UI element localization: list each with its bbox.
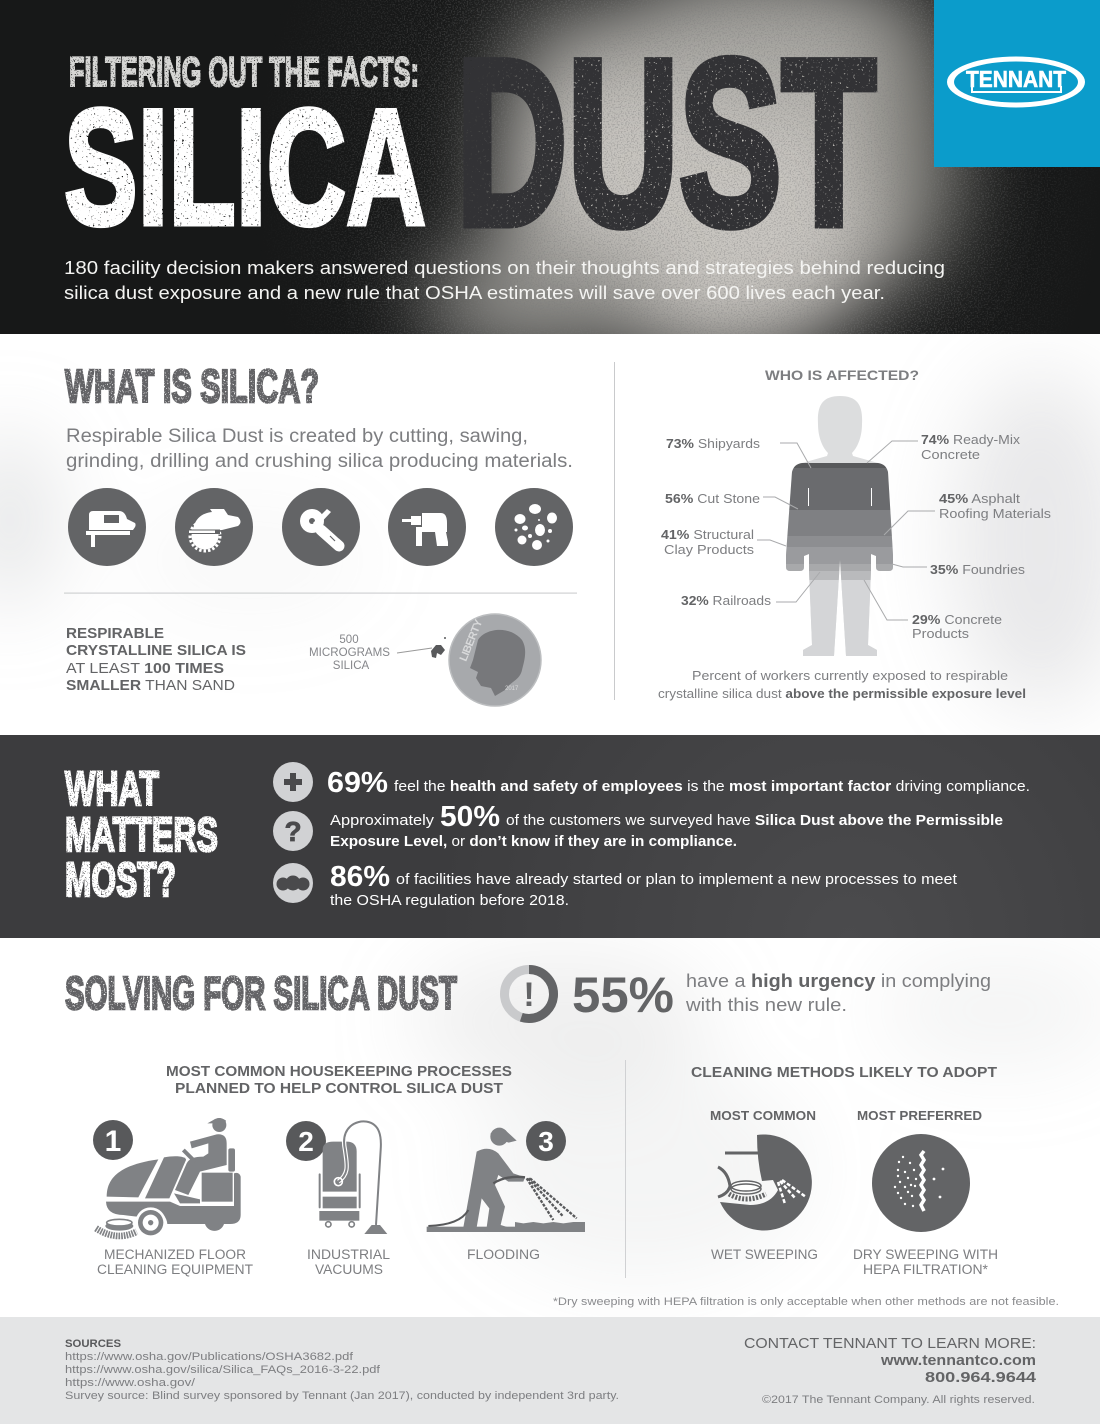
title kicker: FILTERING OUT THE FACTS:	[69, 48, 419, 95]
subheadings: most common and most preferred	[710, 1109, 982, 1123]
label: 500 micrograms silica: SILICA	[333, 660, 370, 672]
labels: housekeeping processes: VACUUMS	[315, 1262, 383, 1277]
icon: worker flooding floor with hose	[427, 1128, 585, 1232]
text: 100 times smaller: AT LEAST 100 TIMES	[66, 660, 224, 677]
labels: industries: Products	[912, 626, 970, 641]
labels: housekeeping processes: INDUSTRIAL	[307, 1247, 391, 1262]
icon: crushed particles	[495, 488, 573, 566]
icon: jigsaw cutting	[68, 488, 146, 566]
labels: cleaning methods: WET SWEEPING	[711, 1247, 818, 1262]
stat: 50 percent: of the customers we surveyed have Silica Dust above the Permissible	[506, 812, 1003, 829]
icon: dime with dust pile: LIBERTY	[458, 617, 486, 663]
subheadings: most common and most preferred: MOST COMMON	[710, 1109, 816, 1123]
heading: what matters most: MATTERS	[65, 809, 218, 862]
stat: 69 percent: feel the health and safety of employees is the most important factor driving compliance.	[394, 778, 1030, 795]
logo: Tennant	[934, 0, 1100, 167]
stat: 86 percent	[330, 861, 958, 909]
icon: number 1: 1	[105, 1125, 121, 1158]
heading: housekeeping processes	[166, 1064, 512, 1097]
text: contact: CONTACT TENNANT TO LEARN MORE:	[744, 1335, 1036, 1352]
title word: silica: SILICA	[64, 75, 426, 259]
logo: Tennant: TENNANT	[966, 66, 1066, 92]
panel: solving for silica dust	[65, 967, 1059, 1308]
text: sources: https://www.osha.gov/Publications/OSHA3682.pdf	[65, 1351, 354, 1363]
labels: industries: 32% Railroads	[681, 593, 772, 608]
labels: housekeeping processes	[97, 1247, 540, 1277]
text: silica definition: grinding, drilling and crushing silica producing materials.	[66, 451, 573, 472]
title word: dust: DUST	[456, 11, 876, 275]
labels: industries: 74% Ready-Mix	[921, 432, 1021, 447]
leader lines	[757, 441, 935, 620]
text: sources: https://www.osha.gov/	[65, 1377, 196, 1389]
panel: what matters most	[0, 735, 1100, 938]
label: 500 micrograms silica	[309, 634, 390, 672]
labels: industries: 45% Asphalt	[939, 491, 1020, 506]
stat: 50 percent: Exposure Level, or don’t know if they are in compliance.	[330, 833, 737, 850]
heading: housekeeping processes: PLANNED TO HELP CONTROL SILICA DUST	[175, 1081, 503, 1097]
stat: 50 percent: 50%	[440, 801, 500, 833]
text: 100 times smaller: SMALLER THAN SAND	[66, 677, 235, 694]
heading: housekeeping processes: MOST COMMON HOUSEKEEPING PROCESSES	[166, 1064, 512, 1080]
icon: wet sweeping	[718, 1135, 812, 1231]
heading: cleaning methods: CLEANING METHODS LIKELY TO ADOPT	[691, 1065, 997, 1081]
subheadings: most common and most preferred: MOST PREFERRED	[857, 1109, 982, 1123]
text: high urgency: with this new rule.	[685, 995, 847, 1015]
stat: 86 percent: the OSHA regulation before 2018.	[330, 892, 569, 909]
panel: footer	[0, 1317, 1100, 1424]
labels: industries: Concrete	[921, 447, 980, 462]
text: sources: https://www.osha.gov/silica/Silica_FAQs_2016-3-22.pdf	[65, 1364, 381, 1376]
icon: industrial vacuum	[319, 1121, 387, 1234]
labels: housekeeping processes: CLEANING EQUIPMENT	[97, 1262, 253, 1277]
icon: number 3: 3	[538, 1126, 554, 1157]
labels: cleaning methods	[711, 1247, 998, 1277]
icon: dry sweeping with HEPA	[872, 1134, 970, 1232]
text: sources: Survey source: Blind survey sponsored by Tennant (Jan 2017), conducted by independent 3rd party.	[65, 1390, 619, 1402]
icon: group of people	[273, 863, 313, 903]
text: sources: SOURCES	[65, 1338, 121, 1350]
text: silica definition	[66, 426, 573, 472]
labels: industries	[661, 432, 1052, 641]
chart: 55 percent donut	[504, 970, 554, 1018]
panel: what is silica	[64, 360, 577, 706]
label: 500 micrograms silica: 500	[339, 634, 359, 646]
intro text	[64, 258, 945, 303]
icon: question mark: ?	[284, 816, 302, 847]
icon: drill	[388, 488, 466, 566]
heading: what is silica: WHAT IS SILICA?	[65, 360, 319, 412]
footnote: *Dry sweeping with HEPA filtration is only acceptable when other methods are not feasible.	[553, 1296, 1059, 1308]
text: contact: www.tennantco.com	[880, 1353, 1036, 1369]
text: sources	[65, 1338, 619, 1402]
label: 500 micrograms silica: MICROGRAMS	[309, 647, 390, 659]
labels: cleaning methods: DRY SWEEPING WITH	[853, 1247, 998, 1262]
text: contact	[744, 1335, 1036, 1406]
text: high urgency	[685, 971, 991, 1015]
stat: 50 percent: Approximately	[330, 812, 435, 829]
panel: header banner	[0, 0, 1100, 360]
labels: housekeeping processes: MECHANIZED FLOOR	[104, 1247, 246, 1262]
icon: number 1	[93, 1120, 133, 1160]
labels: housekeeping processes: FLOODING	[467, 1247, 540, 1262]
icon: dime with dust pile: 2017	[505, 686, 519, 692]
caption: percent of workers: crystalline silica dust above the permissible exposure level	[658, 686, 1026, 701]
labels: cleaning methods: HEPA FILTRATION*	[863, 1262, 989, 1277]
stat: 69 percent: 69%	[327, 767, 388, 799]
icon: number 2	[286, 1121, 326, 1161]
heading: what matters most: WHAT	[65, 763, 159, 816]
heading: who is affected: WHO IS AFFECTED?	[765, 367, 919, 383]
labels: industries: Clay Products	[664, 542, 755, 557]
heading: what matters most: MOST?	[65, 854, 176, 907]
stat: 86 percent: 86%	[330, 861, 390, 893]
intro text: 180 facility decision makers answered questions on their thoughts and strategies behind reducing	[64, 258, 945, 278]
intro text: silica dust exposure and a new rule that OSHA estimates will save over 600 lives each year.	[64, 283, 885, 303]
icon: number 3	[526, 1121, 566, 1161]
stat: 69 percent	[327, 767, 1030, 799]
stat: 86 percent: of facilities have already started or plan to implement a new processes to meet	[396, 871, 958, 888]
labels: industries: 56% Cut Stone	[665, 491, 760, 506]
caption: percent of workers	[658, 668, 1026, 701]
panel: who is affected	[658, 367, 1052, 701]
text: contact: ©2017 The Tennant Company. All rights reserved.	[762, 1394, 1035, 1406]
icon: question mark	[273, 811, 313, 851]
stat: 50 percent	[330, 801, 1003, 850]
chart: 55 percent donut: !	[523, 976, 535, 1014]
labels: industries: 41% Structural	[661, 527, 754, 542]
text: 100 times smaller: CRYSTALLINE SILICA IS	[66, 642, 246, 659]
labels: industries: 73% Shipyards	[666, 436, 761, 451]
caption: percent of workers: Percent of workers currently exposed to respirable	[692, 668, 1008, 683]
text: 100 times smaller: RESPIRABLE	[66, 625, 164, 642]
chart: exposure by body silhouette	[786, 396, 893, 656]
labels: industries: 29% Concrete	[912, 612, 1002, 627]
labels: industries: Roofing Materials	[939, 506, 1052, 521]
icon: plus	[273, 762, 313, 802]
stat: 55 percent: 55%	[572, 967, 674, 1023]
icon: circular saw	[175, 488, 253, 566]
text: contact: 800.964.9644	[925, 1370, 1036, 1386]
icon: angle grinder	[282, 488, 360, 566]
text: silica definition: Respirable Silica Dust is created by cutting, sawing,	[66, 426, 528, 447]
heading: solving for silica dust: SOLVING FOR SILICA DUST	[65, 967, 457, 1019]
text: high urgency: have a high urgency in complying	[686, 971, 991, 991]
text: 100 times smaller	[66, 625, 246, 694]
labels: industries: 35% Foundries	[930, 562, 1026, 577]
icon: number 2: 2	[298, 1126, 314, 1157]
heading: what matters most	[65, 763, 218, 907]
icon: floor cleaning machine	[96, 1118, 241, 1238]
icon: dime with dust pile	[397, 614, 541, 706]
